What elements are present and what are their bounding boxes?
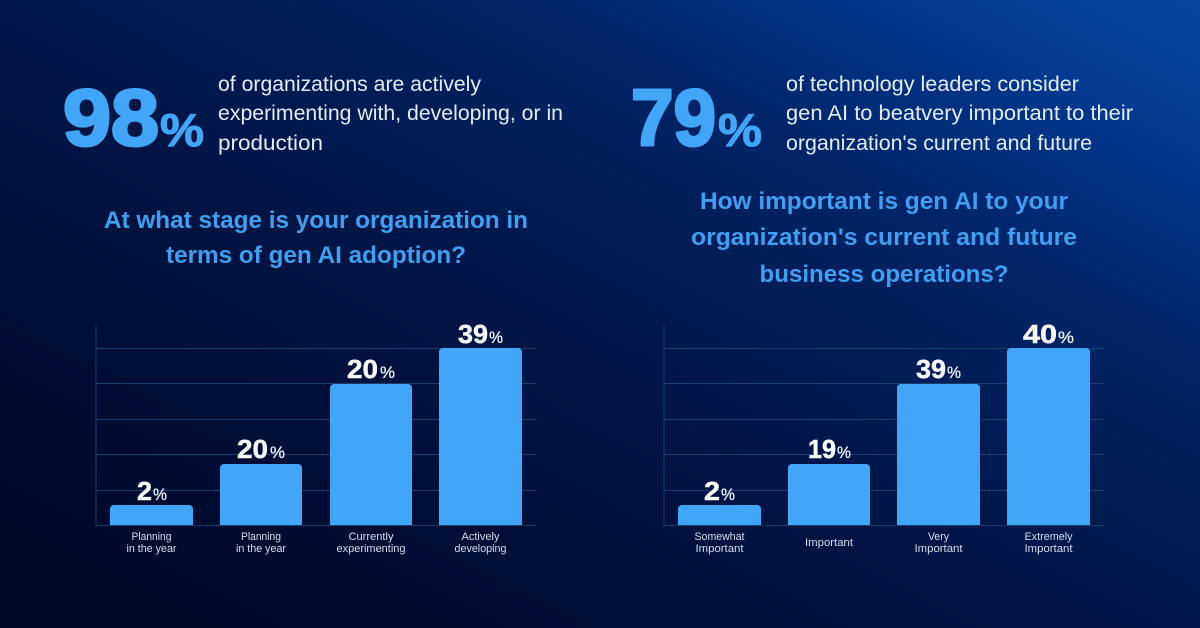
bar: extremely important 40 percent: Extremely bbox=[1024, 531, 1073, 543]
text block: 79 percent description: of technology leaders consider bbox=[786, 73, 1079, 96]
stat: 98 percent: 98 bbox=[63, 73, 159, 162]
bar: actively developing 39 percent: % bbox=[489, 328, 503, 347]
bar: very important 39 percent: Important bbox=[914, 543, 962, 555]
bar: somewhat important 2 percent bbox=[678, 476, 761, 555]
heading: adoption question bbox=[104, 207, 528, 269]
text block: 98 percent description: production bbox=[218, 132, 323, 155]
panel: importance of gen AI bbox=[631, 73, 1133, 555]
text block: 98 percent description: experimenting with, developing, or in bbox=[218, 102, 563, 125]
bar: somewhat important 2 percent: % bbox=[721, 485, 735, 504]
stat: 79 percent bbox=[631, 73, 762, 162]
panel: adoption stage bbox=[63, 73, 563, 555]
bar: somewhat important 2 percent: Important bbox=[696, 543, 744, 555]
text block: 98 percent description: of organizations are actively bbox=[218, 73, 481, 96]
bar: somewhat important 2 percent: Somewhat bbox=[694, 531, 744, 543]
bar: currently experimenting 20 percent: experimenting bbox=[336, 543, 406, 555]
heading: importance question: business operations? bbox=[760, 261, 1008, 288]
bar: very important 39 percent: 39 bbox=[916, 354, 946, 384]
stat: 98 percent: % bbox=[160, 104, 204, 156]
bar: planning 2 percent: 2 bbox=[137, 476, 152, 506]
bar: currently experimenting 20 percent: 20 bbox=[347, 354, 378, 384]
bar: extremely important 40 percent bbox=[1007, 319, 1090, 555]
bar: important 19 percent: % bbox=[837, 443, 851, 462]
bar: planning 2 percent bbox=[110, 476, 193, 555]
stat: 79 percent: % bbox=[718, 104, 762, 156]
bar: planning 2 percent: in the year bbox=[126, 543, 177, 555]
heading: importance question bbox=[691, 188, 1077, 288]
bar chart: importance bbox=[664, 319, 1104, 555]
bar: planning 20 percent: in the year bbox=[236, 543, 286, 555]
bar: actively developing 39 percent: 39 bbox=[458, 319, 488, 349]
stat: 98 percent bbox=[63, 73, 204, 162]
text block: 98 percent description bbox=[218, 73, 563, 155]
bar: planning 2 percent: % bbox=[153, 485, 167, 504]
bar: very important 39 percent: % bbox=[947, 363, 961, 382]
heading: importance question: organization's current and future bbox=[691, 224, 1077, 251]
bar: planning 20 percent: Planning bbox=[241, 531, 281, 543]
bar: extremely important 40 percent: 40 bbox=[1023, 319, 1057, 349]
bar chart: adoption stage bbox=[96, 319, 536, 555]
bar: extremely important 40 percent: % bbox=[1058, 328, 1074, 347]
text block: 79 percent description: gen AI to beatvery important to their bbox=[786, 102, 1133, 125]
bar: important 19 percent: 19 bbox=[808, 434, 836, 464]
bar: very important 39 percent bbox=[897, 354, 980, 555]
bar: actively developing 39 percent: developing bbox=[454, 543, 506, 555]
bar: currently experimenting 20 percent: Currently bbox=[348, 531, 394, 543]
bar: currently experimenting 20 percent: % bbox=[380, 363, 395, 382]
bar: planning 2 percent: Planning bbox=[132, 531, 172, 543]
heading: adoption question: At what stage is your organization in bbox=[104, 207, 528, 234]
bar: planning 20 percent: % bbox=[270, 443, 285, 462]
bar: important 19 percent: Important bbox=[805, 537, 853, 549]
bar: planning 20 percent: 20 bbox=[237, 434, 268, 464]
bar: planning 20 percent bbox=[220, 434, 302, 555]
text block: 79 percent description: organization's current and future bbox=[786, 132, 1092, 155]
bar: somewhat important 2 percent: 2 bbox=[704, 476, 720, 506]
bar: important 19 percent bbox=[788, 434, 870, 549]
bar: currently experimenting 20 percent bbox=[330, 354, 412, 555]
bar: very important 39 percent: Very bbox=[928, 531, 949, 543]
stat: 79 percent: 79 bbox=[631, 73, 716, 162]
heading: importance question: How important is gen AI to your bbox=[700, 188, 1068, 215]
text block: 79 percent description bbox=[786, 73, 1133, 155]
bar: extremely important 40 percent: Important bbox=[1024, 543, 1072, 555]
bar: actively developing 39 percent: Actively bbox=[462, 531, 500, 543]
heading: adoption question: terms of gen AI adoption? bbox=[166, 242, 466, 269]
bar: actively developing 39 percent bbox=[439, 319, 522, 555]
